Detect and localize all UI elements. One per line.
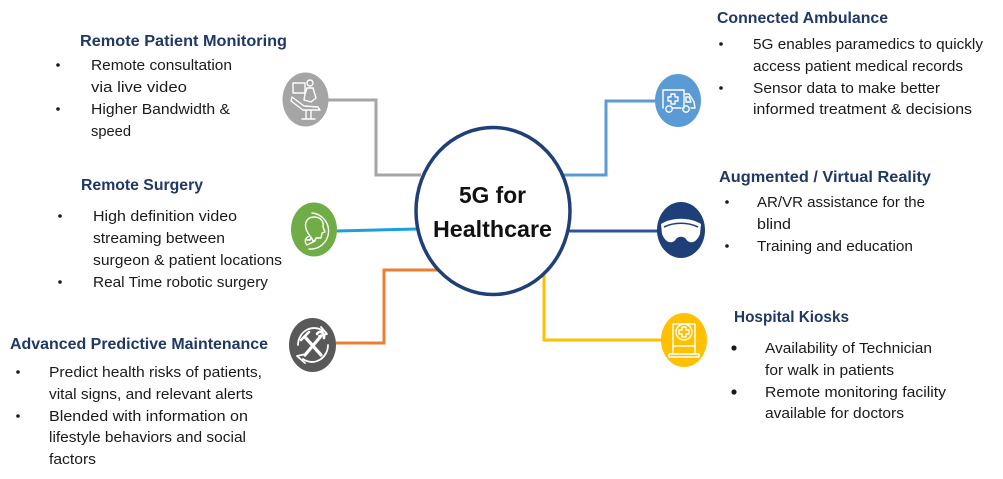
connector: remote surgery [337, 229, 417, 231]
text block: Connected Ambulance: informed treatment & decisions [753, 101, 972, 118]
text block: Advanced Predictive Maintenance: vital signs, and relevant alerts [49, 386, 253, 403]
text block: Connected Ambulance: Connected Ambulance [717, 10, 888, 27]
text block: Hospital Kiosks: Availability of Technician [765, 340, 932, 357]
text block: Hospital Kiosks: Hospital Kiosks [734, 309, 849, 326]
central hub: 5G for Healthcare: Healthcare [433, 216, 552, 242]
text block: Remote Surgery: streaming between [93, 230, 225, 247]
icon: connected ambulance [655, 74, 701, 127]
text block: Augmented / Virtual Reality: Augmented / Virtual Reality [719, 169, 931, 186]
text block: Remote Patient Monitoring: Remote consultation [91, 57, 232, 74]
connector: remote patient monitoring [328, 100, 421, 175]
text block: Augmented / Virtual Reality: blind [757, 216, 791, 233]
text block: Advanced Predictive Maintenance: Advanced Predictive Maintenance [10, 336, 268, 353]
icon: predictive maintenance [289, 318, 336, 372]
text block: Remote Patient Monitoring: Higher Bandwidth & [91, 101, 230, 118]
text block: Remote Patient Monitoring: Remote Patient Monitoring [80, 33, 287, 50]
text block: Remote Patient Monitoring [56, 33, 287, 140]
text block: Hospital Kiosks: Remote monitoring facility [765, 384, 947, 401]
connector: augmented reality [565, 230, 658, 232]
text block: Hospital Kiosks: for walk in patients [765, 362, 894, 379]
text block: Advanced Predictive Maintenance: lifestyle behaviors and social [49, 429, 246, 446]
text block: Connected Ambulance: 5G enables paramedics to quickly [753, 36, 984, 53]
text block: Augmented / Virtual Reality: Training and education [757, 238, 913, 255]
text block: Remote Surgery: High definition video [93, 208, 237, 225]
icon: remote patient monitoring [282, 72, 328, 126]
central hub: 5G for Healthcare [416, 128, 570, 294]
icon: hospital kiosk [661, 313, 707, 367]
icon: remote surgery [291, 202, 337, 256]
text block: Remote Surgery: Remote Surgery [81, 177, 203, 194]
text block: Remote Surgery: surgeon & patient locations [93, 252, 282, 269]
text block: Hospital Kiosks [731, 309, 947, 422]
central hub: 5G for Healthcare: 5G for [459, 182, 526, 208]
text block: Remote Patient Monitoring: via live video [91, 79, 187, 96]
text block: Advanced Predictive Maintenance: Blended with information on [49, 408, 248, 425]
connector: connected ambulance [558, 101, 655, 175]
text block: Augmented / Virtual Reality [719, 169, 931, 255]
text block: Connected Ambulance [717, 10, 984, 118]
text block: Advanced Predictive Maintenance: factors [49, 451, 96, 468]
text block: Hospital Kiosks: available for doctors [765, 405, 904, 422]
text block: Connected Ambulance: access patient medical records [753, 58, 963, 75]
connector: hospital kiosks [544, 270, 662, 340]
text block: Connected Ambulance: Sensor data to make better [753, 80, 940, 97]
text block: Remote Surgery [58, 177, 282, 291]
text block: Remote Surgery: Real Time robotic surgery [93, 274, 269, 291]
text block: Augmented / Virtual Reality: AR/VR assistance for the [757, 194, 925, 211]
icon: augmented reality headset [657, 202, 705, 258]
text block: Advanced Predictive Maintenance [10, 336, 268, 468]
text block: Remote Patient Monitoring: speed [91, 123, 131, 140]
text block: Advanced Predictive Maintenance: Predict health risks of patients, [49, 364, 262, 381]
connector: predictive maintenance [336, 270, 442, 343]
